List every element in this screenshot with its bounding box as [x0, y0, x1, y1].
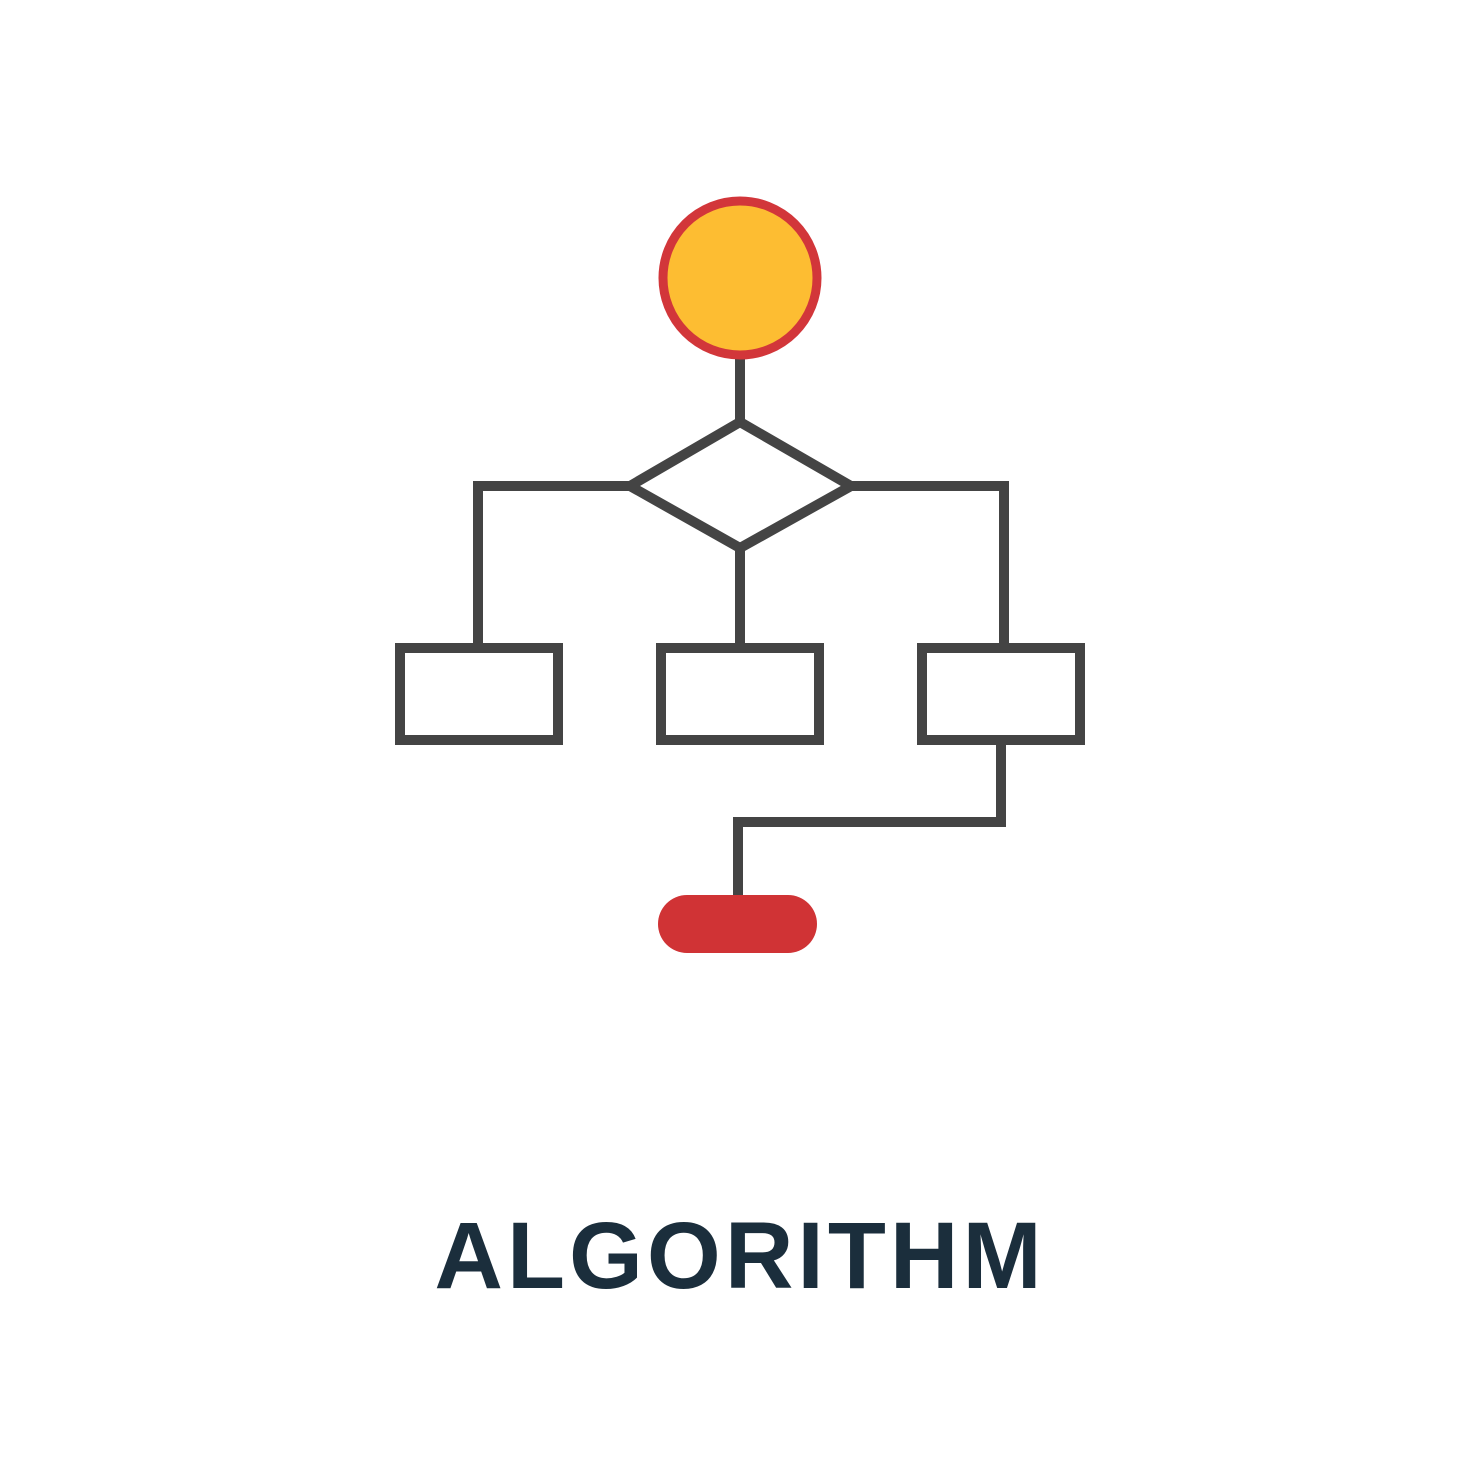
process boxes [400, 648, 1080, 740]
start circle [663, 201, 817, 355]
title: ALGORITHM [434, 1203, 1046, 1309]
end terminator [658, 895, 817, 953]
connector lines [478, 355, 1004, 898]
decision diamond [630, 422, 851, 548]
